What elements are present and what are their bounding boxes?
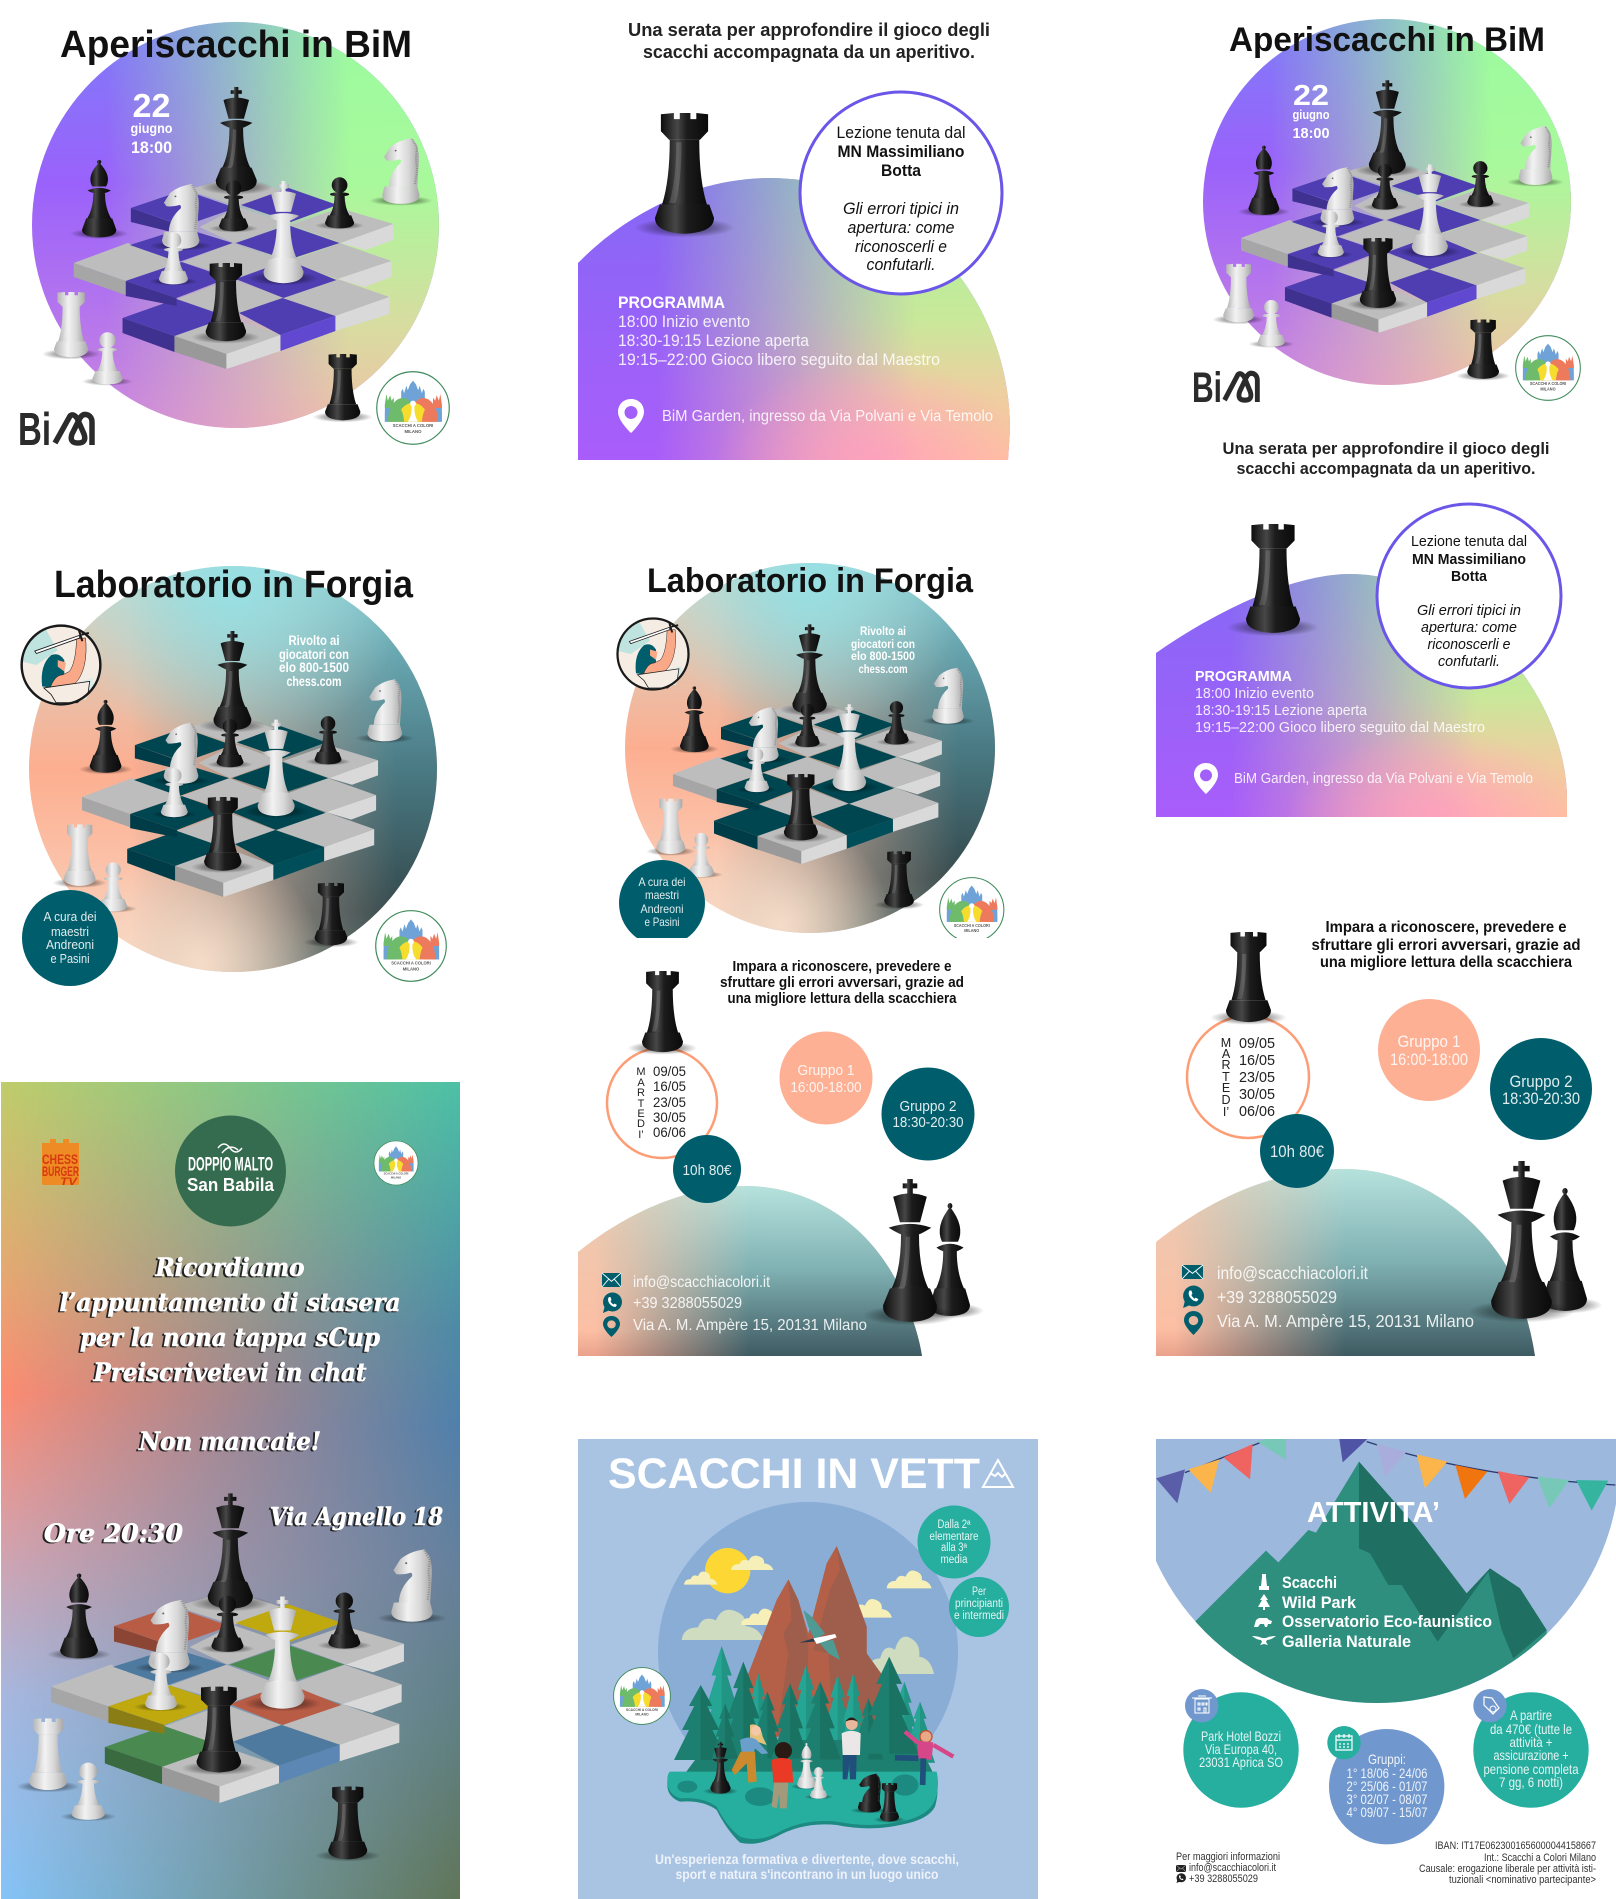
background: [578, 1439, 1038, 1899]
activity list: Osservatorio Eco-faunistico: [1282, 1612, 1492, 1631]
price circle: [1473, 1692, 1589, 1808]
lecturer circle: [1377, 504, 1561, 688]
dates circle: E: [637, 1108, 645, 1120]
contacts: [633, 1274, 867, 1334]
dates circle: 30/05: [653, 1109, 686, 1125]
gradient shape: [578, 1186, 922, 1356]
activity list: Scacchi: [1282, 1573, 1337, 1592]
dates circle: A: [637, 1077, 645, 1089]
activity icons: [1252, 1574, 1276, 1645]
tagline: Un'esperienza formativa e divertente, dove scacchi,: [655, 1851, 959, 1867]
title: Aperiscacchi in BiM: [1229, 21, 1545, 59]
date and time: giugno: [1292, 107, 1330, 122]
teachers badge: [22, 890, 118, 986]
Scacchi a Colori logo: MILANO: [964, 928, 980, 933]
date and time: giugno: [130, 120, 172, 136]
lecturer circle: Lezione tenuta dal: [1411, 533, 1527, 550]
contacts: Via A. M. Ampère 15, 20131 Milano: [633, 1317, 867, 1334]
audience badge: age: Dalla 2ª: [938, 1519, 971, 1531]
programme: 18:30-19:15 Lezione aperta: [618, 331, 809, 350]
description: [720, 959, 964, 1007]
price badge: [673, 1135, 741, 1203]
address: BiM Garden, ingresso da Via Polvani e Via Temolo: [1234, 771, 1533, 787]
Doppio Malto badge: San Babila: [187, 1175, 275, 1195]
programme: 18:00 Inizio evento: [1195, 685, 1314, 702]
activity list: Galleria Naturale: [1282, 1632, 1411, 1651]
lecturer circle: riconoscerli e: [1428, 636, 1510, 653]
dates circle: 06/06: [1239, 1103, 1275, 1120]
title: Laboratorio in Forgia: [54, 564, 414, 606]
description: una migliore lettura della scacchiera: [1320, 954, 1572, 971]
venue: Via Agnello 18: [270, 1502, 443, 1531]
description: una migliore lettura della scacchiera: [728, 991, 957, 1007]
dates circle: I’: [638, 1129, 644, 1141]
dates circle: 16/05: [653, 1078, 686, 1094]
lecturer circle: Gli errori tipici in: [843, 199, 959, 218]
Scacchi a Colori logo: SCACCHI A COLORI: [391, 961, 431, 966]
dates circle: [1329, 1729, 1444, 1844]
Scacchi a Colori logo: SCACCHI A COLORI: [626, 1708, 658, 1712]
heading: [628, 20, 990, 62]
rook: [628, 971, 697, 1055]
gradient background: [1, 1082, 460, 1899]
dates circle: E: [1222, 1081, 1230, 1095]
rook: [634, 113, 735, 237]
programme: 19:15–22:00 Gioco libero seguito dal Maestro: [1195, 719, 1485, 736]
description: Impara a riconoscere, prevedere e: [732, 959, 952, 975]
programme: 18:00 Inizio evento: [618, 312, 750, 331]
gradient circle: [32, 22, 439, 428]
chess burger logo: BURGER: [42, 1163, 79, 1179]
mountain icon: [983, 1460, 1013, 1487]
target audience: elo 800-1500: [851, 649, 915, 663]
audience badge: level: Per: [972, 1586, 986, 1598]
group 2 badge: 18:30-20:30: [1502, 1090, 1580, 1108]
target audience: [279, 633, 349, 689]
dates circle: [607, 1048, 717, 1158]
teachers badge: maestri: [645, 888, 679, 902]
heading: Una serata per approfondire il gioco degli: [1222, 439, 1550, 458]
group 1 badge: Gruppo 1: [798, 1062, 854, 1079]
contact info: +39 3288055029: [1189, 1873, 1258, 1885]
target audience: [851, 626, 915, 673]
lecturer circle: confutarli.: [866, 255, 936, 274]
panel: Aperiscacchi program: [578, 20, 1010, 460]
reminder text: l’appuntamento di stasera: [60, 1288, 400, 1317]
date and time: [1292, 80, 1330, 142]
dates circle: I’: [1223, 1105, 1229, 1119]
price circle: A partire: [1510, 1707, 1552, 1723]
chess board with pieces: [16, 1493, 447, 1862]
gradient circle: [29, 566, 437, 972]
king and bishop: [862, 1179, 984, 1325]
group 2 badge: Gruppo 2: [900, 1098, 956, 1115]
dates circle: 3° 02/07 - 08/07: [1346, 1791, 1428, 1807]
king and bishop: [1468, 1161, 1602, 1322]
target audience: giocatori con: [851, 637, 915, 651]
panel: Laboratorio in Forgia combined lower: [578, 959, 984, 1356]
date and time: 22: [1293, 80, 1329, 112]
audience badge: age: elementare: [930, 1531, 978, 1543]
Scacchi a Colori logo: [377, 372, 449, 444]
teachers badge: e Pasini: [644, 915, 680, 929]
dates circle: 16/05: [1239, 1052, 1275, 1069]
heading: ATTIVITA’: [1307, 1497, 1440, 1529]
chess burger logo: [42, 1139, 79, 1188]
dates circle: M: [636, 1066, 646, 1078]
panel: Scacchi in Vetta: [578, 1439, 1038, 1899]
teachers badge: A cura dei: [638, 875, 686, 889]
Scacchi a Colori logo: SCACCHI A COLORI: [393, 423, 434, 429]
lecturer circle: apertura: come: [848, 218, 954, 237]
Scacchi a Colori logo: SCACCHI A COLORI: [384, 1172, 409, 1176]
Scacchi a Colori logo: SCACCHI A COLORI: [954, 923, 990, 928]
programme: [618, 293, 940, 369]
sky semicircle with mountain: [1150, 1439, 1616, 1720]
Scacchi a Colori logo: MILANO: [1540, 386, 1556, 391]
price circle: attività +: [1510, 1734, 1552, 1750]
Doppio Malto badge: [175, 1116, 286, 1226]
Scacchi a Colori logo: [1516, 336, 1580, 400]
description: [1312, 919, 1580, 971]
panel: Laboratorio in Forgia right lower: [1156, 919, 1602, 1356]
chess board with pieces: [1212, 80, 1564, 381]
price circle: pensione completa: [1484, 1761, 1579, 1777]
tagline: [655, 1851, 959, 1882]
reminder text: Preiscrivetevi in chat: [93, 1358, 367, 1387]
audience badge: level: [949, 1577, 1009, 1637]
lecturer circle: Botta: [1451, 568, 1488, 585]
hotel circle: 23031 Aprica SO: [1199, 1754, 1283, 1770]
children illustration: [732, 1717, 953, 1808]
gradient shape: [578, 178, 1010, 460]
sky circle: [658, 1502, 958, 1802]
lecturer circle: confutarli.: [1438, 653, 1500, 670]
contact icons: [1182, 1265, 1204, 1335]
group 2 badge: 18:30-20:30: [892, 1114, 964, 1131]
chess board with pieces: [646, 624, 975, 909]
panel: Laboratorio in Forgia combined upper: [617, 562, 1004, 946]
gradient shape: [1156, 574, 1567, 817]
group 1 badge: 16:00-18:00: [790, 1079, 862, 1096]
BiM logo: Bi: [18, 403, 51, 455]
description: sfruttare gli errori avversari, grazie ad: [1312, 937, 1580, 954]
lecturer circle: Lezione tenuta dal: [836, 123, 966, 142]
reminder text: Non mancate!: [138, 1427, 321, 1456]
programme: 19:15–22:00 Gioco libero seguito dal Maestro: [618, 350, 940, 369]
teachers badge: [619, 860, 705, 946]
forge emblem: [617, 618, 689, 690]
panel: Laboratorio in Forgia poster: [22, 564, 446, 986]
hotel circle: Via Europa 40,: [1205, 1741, 1277, 1757]
description: sfruttare gli errori avversari, grazie ad: [720, 975, 964, 991]
programme: [1195, 668, 1485, 736]
panel: Attività: [1150, 1439, 1616, 1886]
tagline: sport e natura s'incontrano in un luogo unico: [676, 1866, 938, 1882]
contacts: info@scacchiacolori.it: [1217, 1263, 1368, 1283]
teachers badge: Andreoni: [46, 937, 94, 952]
dates circle: R: [637, 1087, 645, 1099]
title: Aperiscacchi in BiM: [60, 24, 412, 66]
address: BiM Garden, ingresso da Via Polvani e Via Temolo: [662, 408, 993, 425]
chess board with pieces: [53, 631, 414, 947]
group 1 badge: [1378, 999, 1480, 1101]
contact icons: [602, 1273, 622, 1337]
hotel circle: [1183, 1692, 1299, 1808]
group 1 badge: 16:00-18:00: [1390, 1051, 1468, 1069]
price circle: 7 gg, 6 notti): [1499, 1774, 1563, 1790]
dates circle: 09/05: [653, 1063, 686, 1079]
lecturer circle: riconoscerli e: [855, 237, 947, 256]
illustration: [667, 1546, 938, 1844]
teachers badge: maestri: [51, 924, 89, 939]
Scacchi a Colori logo: SCACCHI A COLORI: [1530, 381, 1566, 386]
lecturer circle: [800, 92, 1002, 294]
BiM logo: Bi: [1192, 364, 1222, 412]
heading: Una serata per approfondire il gioco degli: [628, 20, 990, 40]
contacts: info@scacchiacolori.it: [633, 1274, 770, 1291]
group 2 badge: [1490, 1038, 1592, 1140]
dates circle: 30/05: [1239, 1086, 1275, 1103]
description: Impara a riconoscere, prevedere e: [1326, 919, 1567, 936]
hotel icon: [1185, 1689, 1218, 1722]
dates circle: [1187, 1016, 1309, 1138]
Scacchi a Colori logo: MILANO: [403, 966, 420, 971]
Scacchi a Colori logo: [376, 911, 446, 981]
dates circle: Gruppi:: [1368, 1751, 1406, 1767]
dates circle: 2° 25/06 - 01/07: [1346, 1778, 1428, 1794]
programme: PROGRAMMA: [1195, 668, 1292, 685]
dates circle: 09/05: [1239, 1035, 1275, 1052]
Scacchi a Colori logo: [940, 878, 1004, 942]
hotel circle: Park Hotel Bozzi: [1201, 1728, 1281, 1744]
bank details: [1419, 1840, 1596, 1886]
dates circle: 4° 09/07 - 15/07: [1346, 1804, 1428, 1820]
dates circle: 06/06: [653, 1124, 686, 1140]
BiM logo: [18, 403, 92, 455]
panel: sCup reminder poster: [1, 1082, 460, 1899]
Scacchi a Colori logo: MILANO: [391, 1175, 402, 1179]
location pin: [618, 399, 644, 433]
title: Laboratorio in Forgia: [647, 562, 974, 600]
contacts: +39 3288055029: [633, 1295, 742, 1312]
rook: [1210, 932, 1287, 1025]
date and time: 22: [132, 87, 170, 124]
lecturer circle: apertura: come: [1421, 619, 1517, 636]
price badge: [1260, 1114, 1334, 1188]
price badge: 10h 80€: [682, 1162, 732, 1179]
audience badge: age: [918, 1506, 990, 1578]
dates circle: T: [1222, 1070, 1230, 1084]
heading: scacchi accompagnata da un aperitivo.: [1236, 459, 1536, 478]
teachers badge: A cura dei: [44, 909, 97, 924]
Scacchi a Colori logo: [614, 1668, 670, 1724]
title: SCACCHI IN VETT: [608, 1450, 980, 1498]
date and time: 18:00: [1292, 125, 1330, 142]
calendar icon: [1327, 1726, 1361, 1759]
group 1 badge: Gruppo 1: [1398, 1033, 1460, 1051]
reminder text: [60, 1253, 400, 1456]
price tag icon: [1473, 1689, 1507, 1722]
dates circle: R: [1221, 1058, 1231, 1072]
target audience: Rivolto ai: [860, 624, 906, 638]
location pin: [1194, 763, 1218, 794]
price circle: assicurazione +: [1494, 1747, 1568, 1763]
panel: Aperiscacchi poster: [18, 22, 449, 455]
target audience: elo 800-1500: [279, 660, 349, 675]
gradient circle: [1203, 19, 1572, 386]
dates circle: D: [637, 1118, 645, 1130]
dates circle: T: [638, 1098, 645, 1110]
date and time: 18:00: [131, 138, 172, 157]
reminder text: per la nona tappa sCup: [80, 1323, 380, 1352]
dates circle: M: [1221, 1036, 1231, 1050]
teachers badge: e Pasini: [50, 951, 90, 966]
dates circle: A: [1222, 1047, 1231, 1061]
reminder text: Ricordiamo: [155, 1253, 304, 1282]
chess burger logo: TV: [60, 1176, 79, 1188]
BiM logo: [1192, 364, 1257, 412]
contacts: Via A. M. Ampère 15, 20131 Milano: [1217, 1311, 1474, 1331]
bunting: [1156, 1439, 1615, 1511]
group 1 badge: [780, 1032, 872, 1124]
heading: [1222, 439, 1550, 478]
programme: 18:30-19:15 Lezione aperta: [1195, 702, 1368, 719]
teachers badge: Andreoni: [640, 902, 684, 916]
chess board with pieces: [42, 87, 433, 422]
forge emblem: [22, 626, 100, 704]
dates circle: D: [1221, 1093, 1231, 1107]
Scacchi a Colori logo: MILANO: [404, 429, 422, 435]
lecturer circle: Botta: [881, 161, 921, 180]
Doppio Malto badge: DOPPIO MALTO: [188, 1154, 273, 1176]
dates circle: 23/05: [1239, 1069, 1275, 1086]
dates circle: 1° 18/06 - 24/06: [1346, 1765, 1428, 1781]
contact info: Per maggiori informazioni: [1176, 1851, 1280, 1863]
activity list: [1282, 1573, 1492, 1651]
panel: Aperiscacchi combined format: [1156, 19, 1580, 817]
audience badge: level: e intermedi: [954, 1610, 1004, 1622]
heading: scacchi accompagnata da un aperitivo.: [643, 42, 975, 62]
price circle: da 470€ (tutte le: [1490, 1721, 1572, 1737]
contact info: info@scacchiacolori.it: [1189, 1862, 1276, 1874]
contacts: [1217, 1263, 1474, 1331]
audience badge: level: principianti: [955, 1598, 1003, 1610]
Scacchi a Colori logo: MILANO: [635, 1713, 649, 1717]
lecturer circle: MN Massimiliano: [838, 142, 964, 161]
audience badge: age: alla 3ª: [941, 1542, 968, 1554]
time: Ore 20:30: [44, 1519, 184, 1548]
target audience: Rivolto ai: [288, 633, 340, 648]
dates circle: 23/05: [653, 1094, 686, 1110]
group 2 badge: Gruppo 2: [1510, 1073, 1572, 1091]
chess burger logo: CHESS: [42, 1151, 78, 1167]
gradient shape: [1156, 1169, 1535, 1356]
price badge: 10h 80€: [1270, 1143, 1324, 1161]
contacts: +39 3288055029: [1217, 1287, 1337, 1307]
target audience: giocatori con: [279, 647, 349, 662]
lecturer circle: MN Massimiliano: [1412, 551, 1526, 568]
gradient circle: [625, 563, 995, 933]
target audience: chess.com: [858, 662, 908, 676]
field chess pieces: [703, 1742, 906, 1823]
group 2 badge: [882, 1068, 974, 1160]
contact info: [1176, 1851, 1280, 1885]
lecturer circle: Gli errori tipici in: [1417, 602, 1521, 619]
date and time: [130, 87, 172, 157]
activity list: Wild Park: [1282, 1593, 1357, 1612]
rook: [1227, 524, 1319, 636]
programme: PROGRAMMA: [618, 293, 725, 312]
Scacchi a Colori logo: [374, 1141, 418, 1185]
target audience: chess.com: [286, 674, 342, 689]
audience badge: age: media: [940, 1554, 968, 1566]
